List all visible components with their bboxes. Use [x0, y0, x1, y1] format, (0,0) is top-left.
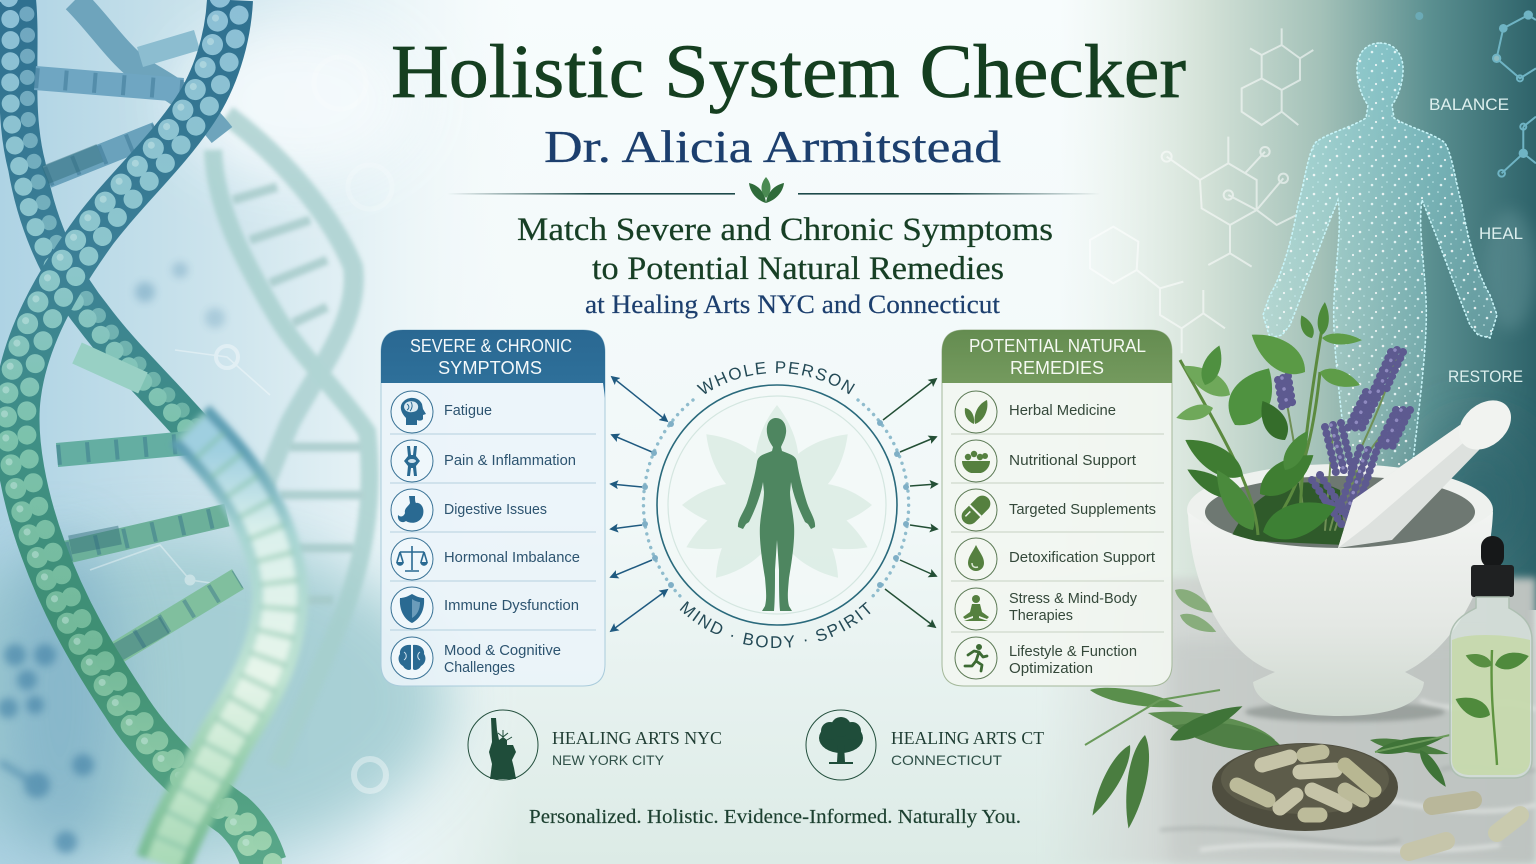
subtitle: to Potential Natural Remedies [592, 251, 1004, 287]
still life: mortar, herbs, bottle, capsules [1085, 302, 1532, 852]
row text: detox: Detoxification Support [1009, 550, 1155, 566]
subtitle [517, 212, 1053, 319]
row text: digestive: Digestive Issues [444, 502, 547, 518]
mortar body [1188, 512, 1493, 716]
icon: runner [965, 644, 987, 671]
icon: head brain [401, 398, 426, 425]
mortar rim and interior [1187, 464, 1493, 556]
NYC label [552, 728, 722, 768]
lower pale strand [163, 425, 280, 864]
teal molecules [1415, 11, 1536, 177]
circle rings [643, 385, 909, 625]
faint background DNA helix [213, 115, 370, 765]
row text: stress [1009, 591, 1138, 624]
icon: statue of liberty [489, 718, 516, 779]
word: balance: BALANCE [1429, 96, 1509, 114]
helix rungs [35, 40, 238, 655]
bottle [1450, 536, 1532, 778]
row text: supplements: Targeted Supplements [1009, 502, 1156, 518]
icon: tree [819, 717, 863, 764]
remedies header [942, 330, 1172, 383]
back strand of helix [9, 0, 222, 455]
leaf mandala [678, 405, 876, 590]
word: heal: HEAL [1479, 225, 1523, 243]
row text: nutritional: Nutritional Support [1009, 453, 1136, 469]
row text: lifestyle: Optimization [1009, 661, 1093, 677]
arc text: whole person: WHOLE PERSON [696, 361, 855, 394]
table herbs [1085, 584, 1450, 830]
front strand of helix [5, 0, 274, 864]
CT label: HEALING ARTS CT [891, 728, 1044, 748]
green herb leaves [1174, 302, 1362, 548]
blurred molecule spots [0, 262, 225, 853]
loose capsules [1409, 800, 1520, 852]
faint rings and bond lines [90, 57, 392, 791]
pestle [1338, 390, 1521, 548]
tagline: Personalized. Holistic. Evidence-Informed. Naturally You. [529, 807, 1021, 828]
remedies header: POTENTIAL NATURAL [969, 336, 1146, 356]
thin back strand [75, 0, 222, 135]
location: CT [806, 710, 1044, 780]
row text: lifestyle [1009, 644, 1137, 677]
subtitle: at Healing Arts NYC and Connecticut [585, 290, 1001, 319]
icon: shield [400, 594, 424, 623]
row text: fatigue: Fatigue [444, 403, 492, 419]
title divider with leaf [447, 177, 1100, 203]
lavender sprigs [1278, 350, 1410, 530]
CT label [891, 728, 1044, 768]
icon: capsule [958, 492, 994, 528]
right arrows [883, 379, 937, 627]
row text: stress: Therapies [1009, 608, 1073, 624]
row text: immune: Immune Dysfunction [444, 598, 579, 614]
symptoms header: SEVERE & CHRONIC [410, 336, 572, 356]
side words [1429, 96, 1523, 386]
row text: lifestyle: Lifestyle & Function [1009, 644, 1137, 660]
row text: mood: Mood & Cognitive [444, 643, 561, 659]
symptoms header: SYMPTOMS [438, 358, 542, 378]
glowing human figure [1263, 43, 1497, 470]
molecule network lines [1090, 11, 1536, 353]
NYC label: HEALING ARTS NYC [552, 728, 722, 748]
row text: mood: Challenges [444, 660, 515, 676]
icon: meditation [963, 595, 989, 621]
title: Holistic System Checker [391, 30, 1186, 114]
DNA helix [5, 0, 280, 864]
icon: leaves [965, 400, 987, 424]
row text: mood [444, 643, 561, 676]
mortar shadow [1245, 702, 1445, 722]
arc text: mind body spirit: MIND · BODY · SPIRIT [680, 601, 870, 648]
NYC label: NEW YORK CITY [552, 752, 665, 768]
icon: food bowl [962, 451, 990, 473]
human silhouette [738, 418, 815, 611]
central body diagram [609, 361, 939, 648]
icon: joint [404, 446, 420, 476]
symptoms header [381, 330, 605, 398]
icon: stomach [398, 496, 423, 523]
row text: pain: Pain & Inflammation [444, 453, 576, 469]
author name: Dr. Alicia Armitstead [544, 121, 1001, 172]
subtitle: Match Severe and Chronic Symptoms [517, 212, 1053, 248]
left arrows [611, 377, 667, 631]
row text: herbal: Herbal Medicine [1009, 403, 1116, 419]
location: NYC [468, 710, 722, 780]
icon: scales [396, 546, 428, 571]
capsule dish [1212, 743, 1398, 831]
CT label: CONNECTICUT [891, 752, 1002, 768]
arrow nodes [642, 420, 909, 588]
word: restore: RESTORE [1448, 368, 1523, 386]
icon: brain [399, 645, 425, 670]
row text: stress: Stress & Mind-Body [1009, 591, 1138, 607]
row text: hormonal: Hormonal Imbalance [444, 550, 580, 566]
panel: symptoms [381, 330, 605, 686]
icon: drop [968, 545, 984, 571]
remedies header: REMEDIES [1010, 358, 1104, 378]
panel: remedies [942, 330, 1172, 686]
pale molecules [1090, 28, 1313, 353]
